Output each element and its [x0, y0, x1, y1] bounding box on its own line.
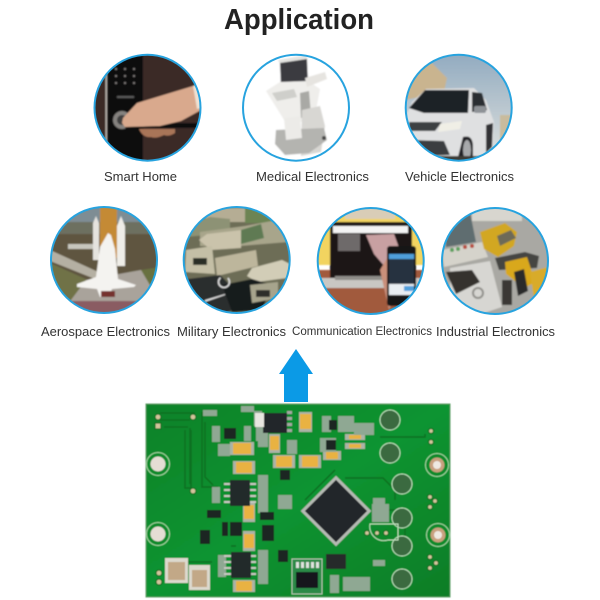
ring — [406, 55, 512, 161]
title: Application — [224, 4, 374, 36]
tantalum capacitors — [230, 412, 365, 592]
label: Military Electronics: Military Electronics — [177, 324, 286, 339]
panel: vehicle electronics — [404, 54, 514, 181]
panel: smart home — [94, 54, 202, 181]
ring — [184, 207, 290, 313]
green via rings — [380, 410, 412, 589]
lower chips — [292, 554, 346, 594]
label: Vehicle Electronics: Vehicle Electronics — [405, 169, 514, 184]
ring — [243, 55, 349, 161]
photo: yellow machine — [443, 209, 547, 313]
panel: aerospace electronics — [41, 205, 170, 339]
mounting holes — [146, 452, 450, 546]
photo: ultrasound cart — [266, 56, 328, 156]
ring — [442, 208, 548, 314]
panel: communication electronics — [292, 205, 432, 338]
traces — [160, 412, 425, 562]
ceramic capacitors — [165, 558, 210, 590]
label: Aerospace Electronics: Aerospace Electronics — [41, 324, 170, 339]
panel: medical electronics — [240, 50, 369, 184]
small pads — [155, 414, 438, 585]
label: Smart Home: Smart Home — [104, 169, 177, 184]
oval outline — [370, 524, 398, 541]
label: Medical Electronics: Medical Electronics — [256, 169, 369, 184]
SOIC chips — [224, 480, 256, 578]
voltage regulator — [255, 411, 292, 433]
ring — [318, 208, 424, 314]
photo: white SUV — [406, 56, 511, 160]
ring — [51, 207, 157, 313]
photo: door lock — [96, 56, 200, 160]
photo: laptop and phone — [318, 209, 423, 313]
small SMD parts — [200, 406, 389, 593]
panel: military electronics — [177, 205, 295, 339]
photo: space shuttle — [52, 208, 156, 312]
QFP microcontroller — [301, 476, 371, 546]
arrow: up to applications — [279, 349, 313, 402]
label: Communication Electronics: Communication Electronics — [292, 326, 432, 338]
circuit board photo — [146, 404, 450, 597]
label: Industrial Electronics: Industrial Electronics — [436, 324, 555, 339]
panel: industrial electronics — [436, 205, 555, 339]
photo: missile trucks — [184, 208, 289, 312]
ring — [94, 55, 200, 161]
